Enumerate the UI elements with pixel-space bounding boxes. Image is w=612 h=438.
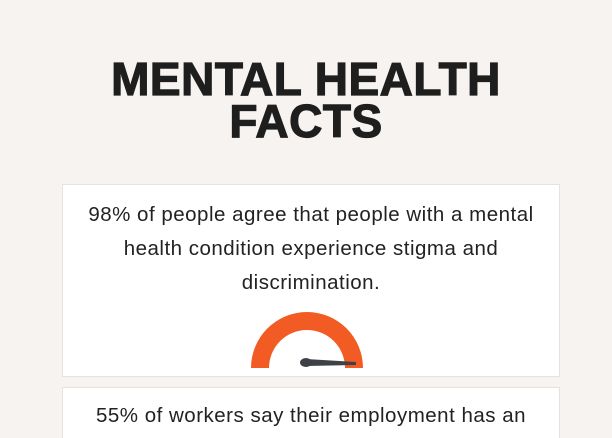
title: MENTAL HEALTH [111, 53, 501, 105]
fact text 1: 98% of people agree that people with a mental [88, 203, 534, 226]
fact text 2: 55% of workers say their employment has an [96, 404, 526, 427]
fact text 2 [96, 404, 526, 438]
title [111, 53, 501, 147]
fact text 1 [88, 203, 534, 294]
fact text 1: health condition experience stigma and [124, 237, 498, 260]
panel: workers fact [62, 387, 560, 438]
fact text 1: discrimination. [242, 271, 380, 294]
title: FACTS [229, 95, 383, 147]
icon: gauge [251, 312, 363, 368]
panel: stigma fact [62, 184, 560, 377]
